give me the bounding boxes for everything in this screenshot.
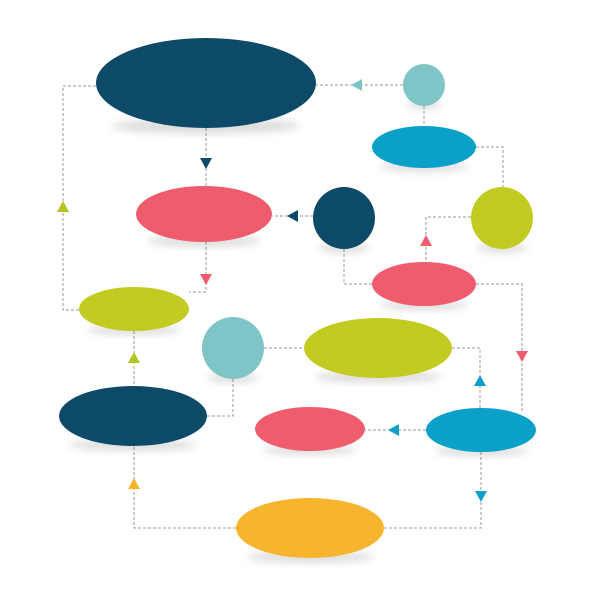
- shape: lime ellipse left: [79, 287, 189, 331]
- shape: pink ellipse: [136, 186, 272, 242]
- shape: lime ellipse middle: [304, 318, 452, 378]
- shadows: [69, 101, 528, 563]
- shape: pink ellipse bottom: [255, 407, 365, 451]
- shape: navy circle: [313, 187, 375, 249]
- shape: navy large ellipse: [96, 38, 316, 128]
- shape: orange ellipse: [236, 498, 384, 558]
- shape: lime circle: [471, 187, 533, 249]
- shape: pink ellipse right: [372, 262, 476, 306]
- shape: teal circle top: [403, 64, 445, 106]
- shape: teal circle middle: [202, 317, 264, 379]
- shape: blue ellipse top: [372, 126, 476, 168]
- shape: blue ellipse bottom: [426, 408, 536, 452]
- connectors: [63, 85, 522, 528]
- shape: navy ellipse left: [59, 386, 207, 446]
- arrows: [57, 79, 528, 502]
